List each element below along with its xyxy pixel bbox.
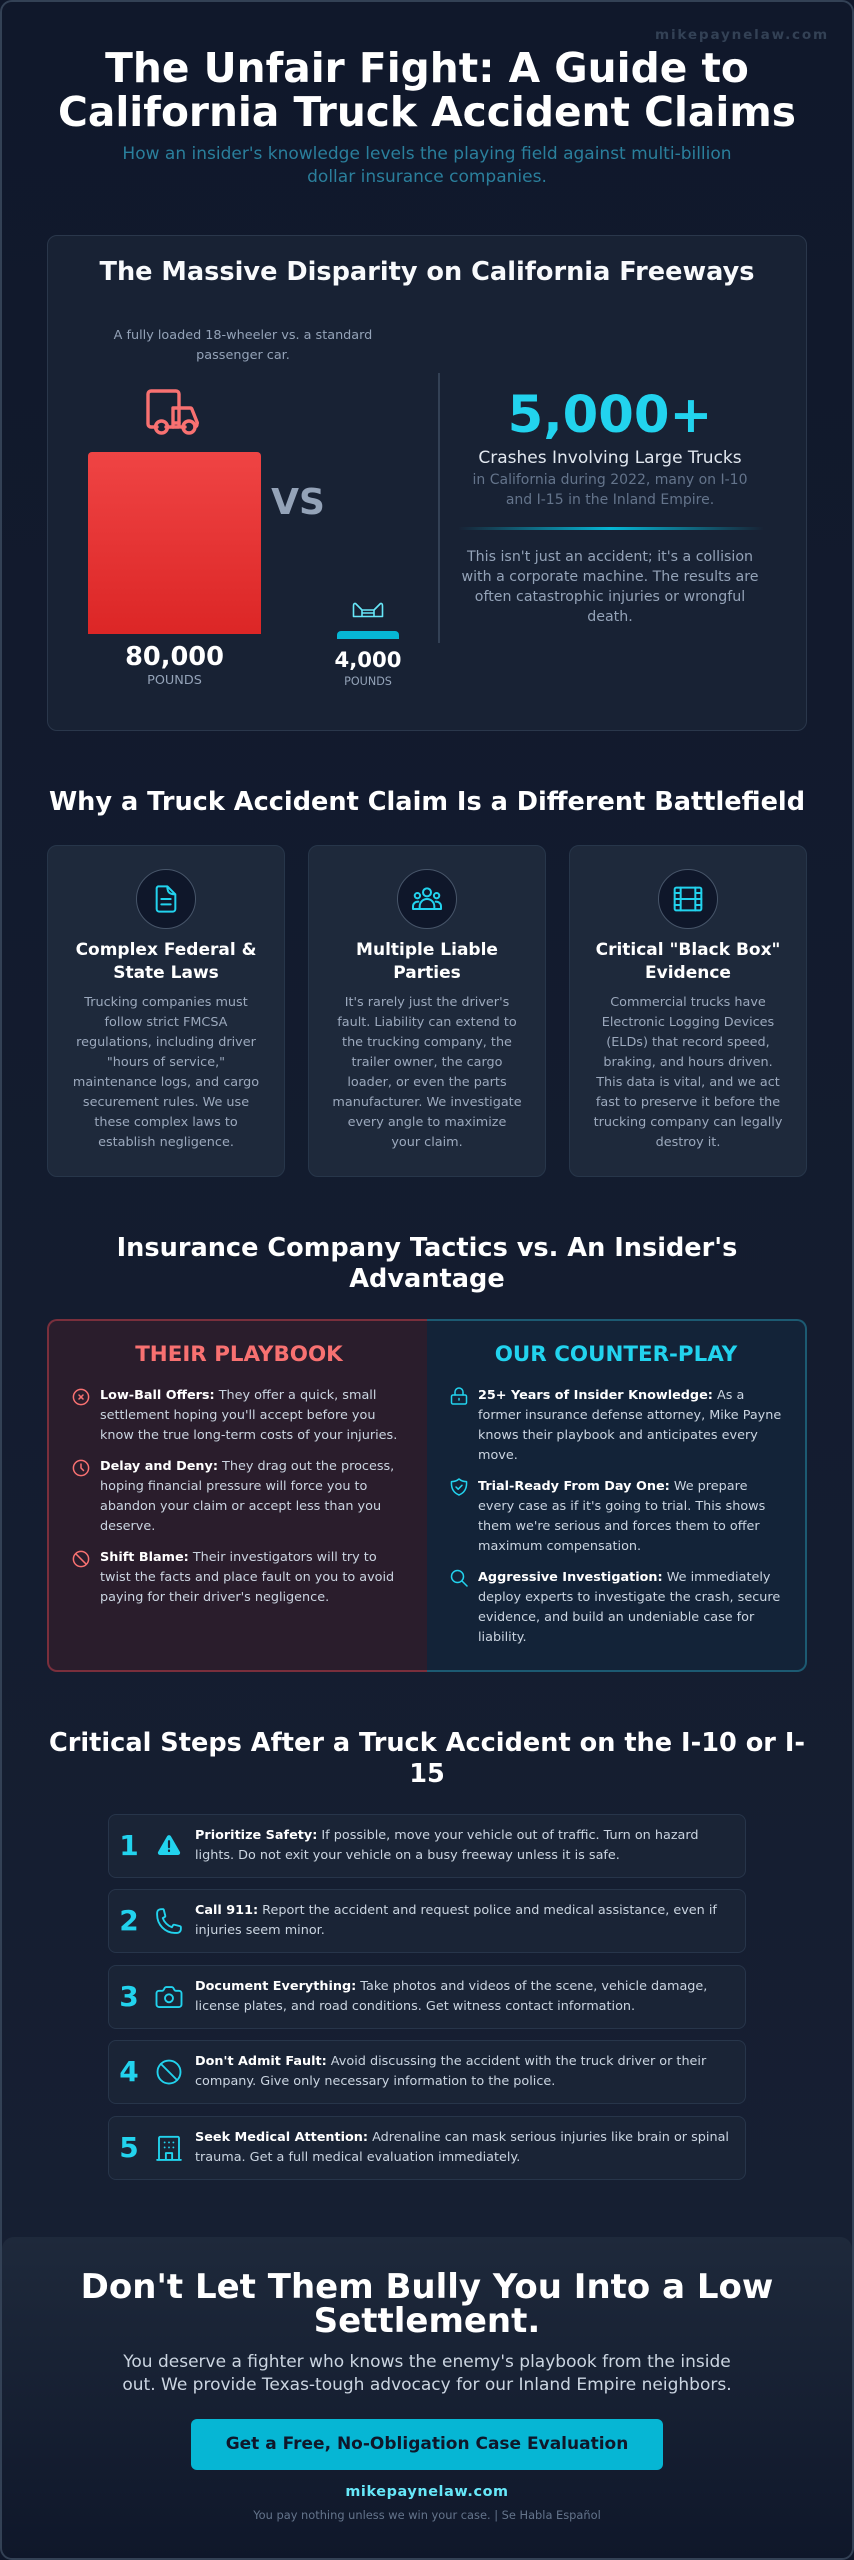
divider [438, 373, 440, 643]
item: investigation [450, 1570, 780, 1645]
step number: 1 [119, 1829, 139, 1862]
card body: Commercial trucks have [610, 995, 766, 1010]
step text: Don't Admit Fault: Avoid discussing the accident with the truck driver or their [195, 2054, 706, 2069]
card body: trailer owner, the cargo [351, 1055, 503, 1070]
card body: trucking company can legally [594, 1115, 782, 1130]
icon: group [397, 869, 457, 929]
stat label: Crashes Involving Large Trucks [478, 448, 742, 468]
card body: "hours of service," [107, 1055, 225, 1070]
text: Aggressive Investigation: We immediately [478, 1570, 770, 1585]
card body: every angle to maximize [348, 1115, 506, 1130]
text: Low-Ball Offers: They offer a quick, small [100, 1388, 376, 1403]
text: them we're serious and forces them to offer [478, 1519, 760, 1534]
glowing rule [458, 527, 764, 530]
step number: 2 [119, 1904, 139, 1937]
cta paragraph: out. We provide Texas-tough advocacy for our Inland Empire neighbors. [122, 2375, 732, 2395]
card body: loader, or even the parts [347, 1075, 507, 1090]
icon: car [352, 602, 384, 618]
subtitle: How an insider's knowledge levels the playing field against multi-billion [122, 144, 732, 164]
icon: phone [156, 1908, 182, 1934]
step text: injuries seem minor. [195, 1923, 325, 1938]
text [100, 1550, 394, 1605]
card body: This data is vital, and we act [596, 1075, 780, 1090]
step text: Seek Medical Attention: Adrenaline can mask serious injuries like brain or spinal [195, 2130, 729, 2145]
panel: massive disparity [47, 235, 807, 731]
cta button: Get a Free, No-Obligation Case Evaluation [226, 2434, 628, 2454]
car weight unit: POUNDS [344, 675, 392, 688]
call to action footer [2, 2237, 852, 2558]
step number: 3 [119, 1980, 139, 2013]
cta heading: Don't Let Them Bully You Into a Low [81, 2267, 773, 2307]
card body: your claim. [391, 1135, 463, 1150]
card body: fault. Liability can extend to [337, 1015, 517, 1030]
text [100, 1388, 397, 1443]
title: California Truck Accident Claims [58, 88, 796, 136]
big stat: 5,000+ [508, 385, 712, 445]
step text: license plates, and road conditions. Get witness contact information. [195, 1999, 635, 2014]
card body: braking, and hours driven. [603, 1055, 773, 1070]
step text [195, 1903, 718, 1938]
card body [332, 995, 522, 1150]
icon: magnifier [450, 1570, 468, 1587]
step text: trauma. Get a full medical evaluation immediately. [195, 2150, 520, 2165]
icon: warning [158, 1835, 180, 1855]
text: settlement hoping you'll accept before you [100, 1408, 375, 1423]
comparison caption: A fully loaded 18-wheeler vs. a standard [114, 328, 372, 343]
step 1 [108, 1814, 746, 1878]
panel: counter-play [427, 1319, 807, 1672]
step text: company. Give only necessary information to the police. [195, 2074, 555, 2089]
section heading: tactics: Advantage [349, 1264, 505, 1294]
icon: truck [146, 389, 199, 435]
step text [195, 1828, 699, 1863]
text: every case as if it's going to trial. This shows [478, 1499, 765, 1514]
icon: shield [450, 1478, 468, 1496]
section heading: critical steps: 15 [409, 1759, 445, 1789]
icon: film [658, 869, 718, 929]
bar: car weight [337, 631, 399, 639]
text [478, 1388, 781, 1463]
icon: document [136, 869, 196, 929]
website: mikepaynelaw.com [345, 2484, 509, 2500]
text: paying for their driver's negligence. [100, 1590, 329, 1605]
icon: x circle [72, 1388, 90, 1406]
text: knows their playbook and anticipates every [478, 1428, 758, 1443]
card title: Critical "Black Box" [596, 940, 780, 960]
item: low-ball [72, 1388, 397, 1443]
step 5 [108, 2116, 746, 2180]
text: former insurance defense attorney, Mike Payne [478, 1408, 781, 1423]
car weight value: 4,000 [334, 647, 402, 672]
panel: their playbook [47, 1319, 427, 1672]
card body: destroy it. [656, 1135, 720, 1150]
section heading: critical steps [49, 1728, 805, 1789]
icon: camera [156, 1986, 182, 2008]
step text: Prioritize Safety: If possible, move your vehicle out of traffic. Turn on hazard [195, 1828, 699, 1843]
text: 25+ Years of Insider Knowledge: As a [478, 1388, 744, 1403]
step number: 4 [119, 2055, 139, 2088]
text [100, 1459, 394, 1534]
section heading: tactics: Insurance Company Tactics vs. An Insider's [117, 1233, 737, 1263]
text [478, 1570, 780, 1645]
card title: State Laws [113, 963, 219, 983]
icon: building [154, 2133, 184, 2163]
step text [195, 2052, 706, 2092]
card body: the trucking company, the [342, 1035, 512, 1050]
stat detail: and I-15 in the Inland Empire. [506, 492, 714, 508]
step text [195, 1979, 707, 2014]
icon: prohibited [72, 1550, 90, 1568]
card body: regulations, including driver [76, 1035, 256, 1050]
subtitle: dollar insurance companies. [307, 167, 547, 187]
truck weight unit: POUNDS [147, 673, 202, 688]
card body: It's rarely just the driver's [345, 995, 509, 1010]
counter-play heading: OUR COUNTER-PLAY [495, 1342, 737, 1367]
cta heading [2, 2270, 852, 2338]
section heading: tactics [117, 1233, 737, 1294]
card body: follow strict FMCSA [105, 1015, 227, 1030]
card body: maintenance logs, and cargo [73, 1075, 259, 1090]
card title: Parties [393, 963, 461, 983]
text: deserve. [100, 1519, 155, 1534]
subtitle [122, 144, 732, 187]
panel heading: The Massive Disparity on California Freeways [99, 257, 754, 287]
card body: establish negligence. [98, 1135, 234, 1150]
text: hoping financial pressure will force you to [100, 1479, 367, 1494]
card title [596, 940, 780, 983]
card body: fast to preserve it before the [596, 1095, 780, 1110]
stat paragraph [461, 549, 758, 625]
cta button [191, 2419, 663, 2470]
title [58, 44, 796, 136]
step 2 [108, 1889, 746, 1953]
step text: lights. Do not exit your vehicle on a busy freeway unless it is safe. [195, 1848, 620, 1863]
playbook heading: THEIR PLAYBOOK [135, 1342, 343, 1367]
card title: Multiple Liable [356, 940, 498, 960]
text: Delay and Deny: They drag out the process, [100, 1459, 394, 1474]
card body: Electronic Logging Devices [602, 1015, 774, 1030]
cta paragraph: You deserve a fighter who knows the enemy's playbook from the inside [123, 2352, 731, 2372]
step text: Document Everything: Take photos and videos of the scene, vehicle damage, [195, 1979, 707, 1994]
item: trial-ready [450, 1478, 765, 1554]
card body [73, 995, 259, 1150]
bar: truck weight [88, 452, 261, 634]
comparison caption [114, 328, 372, 363]
disclaimer: You pay nothing unless we win your case. | Se Habla Español [253, 2508, 601, 2522]
text: twist the facts and place fault on you to avoid [100, 1570, 394, 1585]
icon: lock [450, 1387, 468, 1405]
section heading: critical steps: Critical Steps After a Truck Accident on the I-10 or I- [49, 1728, 805, 1758]
card body: (ELDs) that record speed, [606, 1035, 770, 1050]
cta paragraph [2, 2351, 852, 2397]
text: Shift Blame: Their investigators will try to [100, 1550, 377, 1565]
item: delay [72, 1459, 394, 1534]
stat detail: in California during 2022, many on I-10 [472, 472, 748, 488]
card: black box [569, 845, 807, 1177]
card body: manufacturer. We investigate [332, 1095, 522, 1110]
truck weight value: 80,000 [125, 642, 224, 672]
text: move. [478, 1448, 518, 1463]
stat detail [472, 472, 748, 508]
comparison caption: passenger car. [196, 348, 290, 363]
icon: clock [72, 1460, 90, 1476]
card body [594, 995, 782, 1150]
text: evidence, and build an undeniable case for [478, 1610, 754, 1625]
stat paragraph: often catastrophic injuries or wrongful [475, 589, 745, 605]
step text [195, 2128, 729, 2168]
text: deploy experts to investigate the crash, secure [478, 1590, 780, 1605]
watermark: mikepaynelaw.com [655, 27, 829, 43]
card body: Trucking companies must [84, 995, 248, 1010]
text: know the true long-term costs of your injuries. [100, 1428, 397, 1443]
section heading: battlefield: Why a Truck Accident Claim Is a Different Battlefield [49, 787, 805, 817]
item: insider knowledge [450, 1387, 781, 1463]
step 4 [108, 2040, 746, 2104]
stat paragraph: This isn't just an accident; it's a collision [467, 549, 753, 565]
title: The Unfair Fight: A Guide to [105, 44, 749, 92]
text: abandon your claim or accept less than you [100, 1499, 381, 1514]
card title [76, 940, 256, 983]
card: complex laws [47, 845, 285, 1177]
step 3 [108, 1965, 746, 2029]
card title: Evidence [645, 963, 731, 983]
card title [356, 940, 498, 983]
card title: Complex Federal & [76, 940, 256, 960]
stat paragraph: with a corporate machine. The results are [461, 569, 758, 585]
vs label: VS [271, 482, 325, 523]
card body: these complex laws to [94, 1115, 238, 1130]
text: maximum compensation. [478, 1539, 641, 1554]
text: liability. [478, 1630, 527, 1645]
text: Trial-Ready From Day One: We prepare [478, 1479, 747, 1494]
step number: 5 [119, 2131, 139, 2164]
stat paragraph: death. [587, 609, 633, 625]
card: liable parties [308, 845, 546, 1177]
item: blame [72, 1550, 394, 1605]
cta heading: Settlement. [314, 2301, 540, 2341]
text [478, 1479, 765, 1554]
step text: Call 911: Report the accident and request police and medical assistance, even if [195, 1903, 717, 1918]
icon: prohibited [156, 2060, 182, 2084]
card body: securement rules. We use [83, 1095, 249, 1110]
